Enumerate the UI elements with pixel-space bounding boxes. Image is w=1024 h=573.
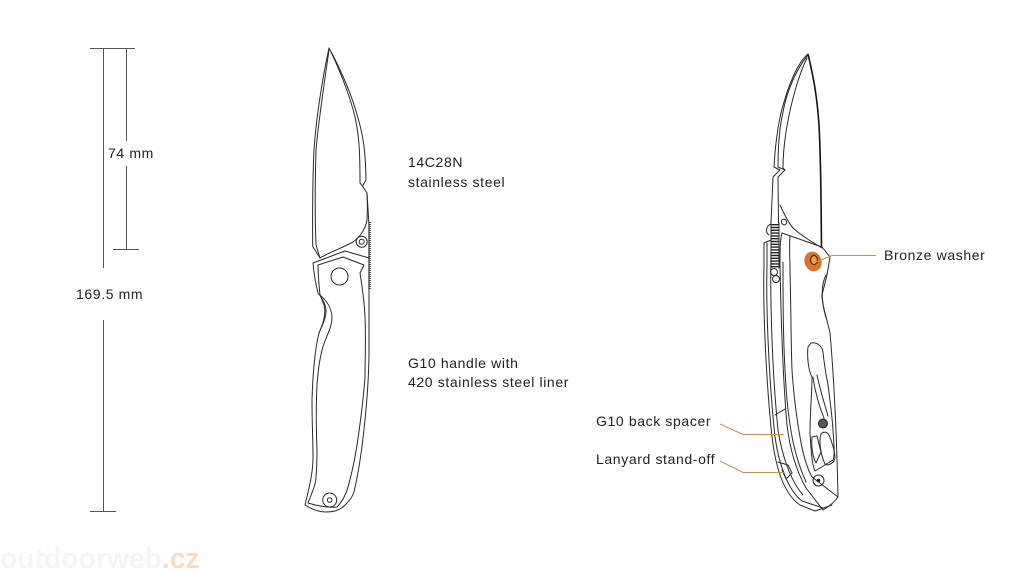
label: blade steel (408, 154, 505, 190)
handle outlines (764, 233, 838, 511)
dimension: 74 mm blade length (108, 48, 154, 250)
dimension: 169.5 mm overall length (76, 48, 143, 512)
handle hole (331, 268, 348, 285)
callout: G10 back spacer (596, 413, 784, 434)
dimension: 74 mm blade length: 74 mm (108, 145, 154, 161)
blade (313, 48, 369, 258)
knife: rear view with clip (764, 54, 838, 511)
bronze washer (802, 249, 824, 274)
handle (305, 251, 369, 512)
callout: bronze washer: Bronze washer (884, 247, 985, 263)
jimping serrations (368, 222, 371, 290)
lanyard screw (323, 493, 337, 507)
label: blade steel: 14C28N (408, 154, 463, 170)
dimension: 169.5 mm overall length: 169.5 mm (76, 286, 143, 302)
blade (771, 54, 822, 248)
callout: bronze washer (816, 247, 985, 263)
pocket clip (808, 343, 835, 486)
spring coil (767, 223, 780, 282)
pivot screw (356, 236, 367, 247)
callout: lanyard stand-off: Lanyard stand-off (596, 451, 715, 467)
callout: lanyard stand-off (596, 451, 784, 472)
label: handle material (408, 355, 569, 390)
label: blade steel: stainless steel (408, 174, 505, 190)
callout: G10 back spacer: G10 back spacer (596, 413, 711, 429)
knife: front view (305, 48, 370, 512)
label: handle material: 420 stainless steel liner (408, 374, 569, 390)
label: handle material: G10 handle with (408, 355, 518, 371)
